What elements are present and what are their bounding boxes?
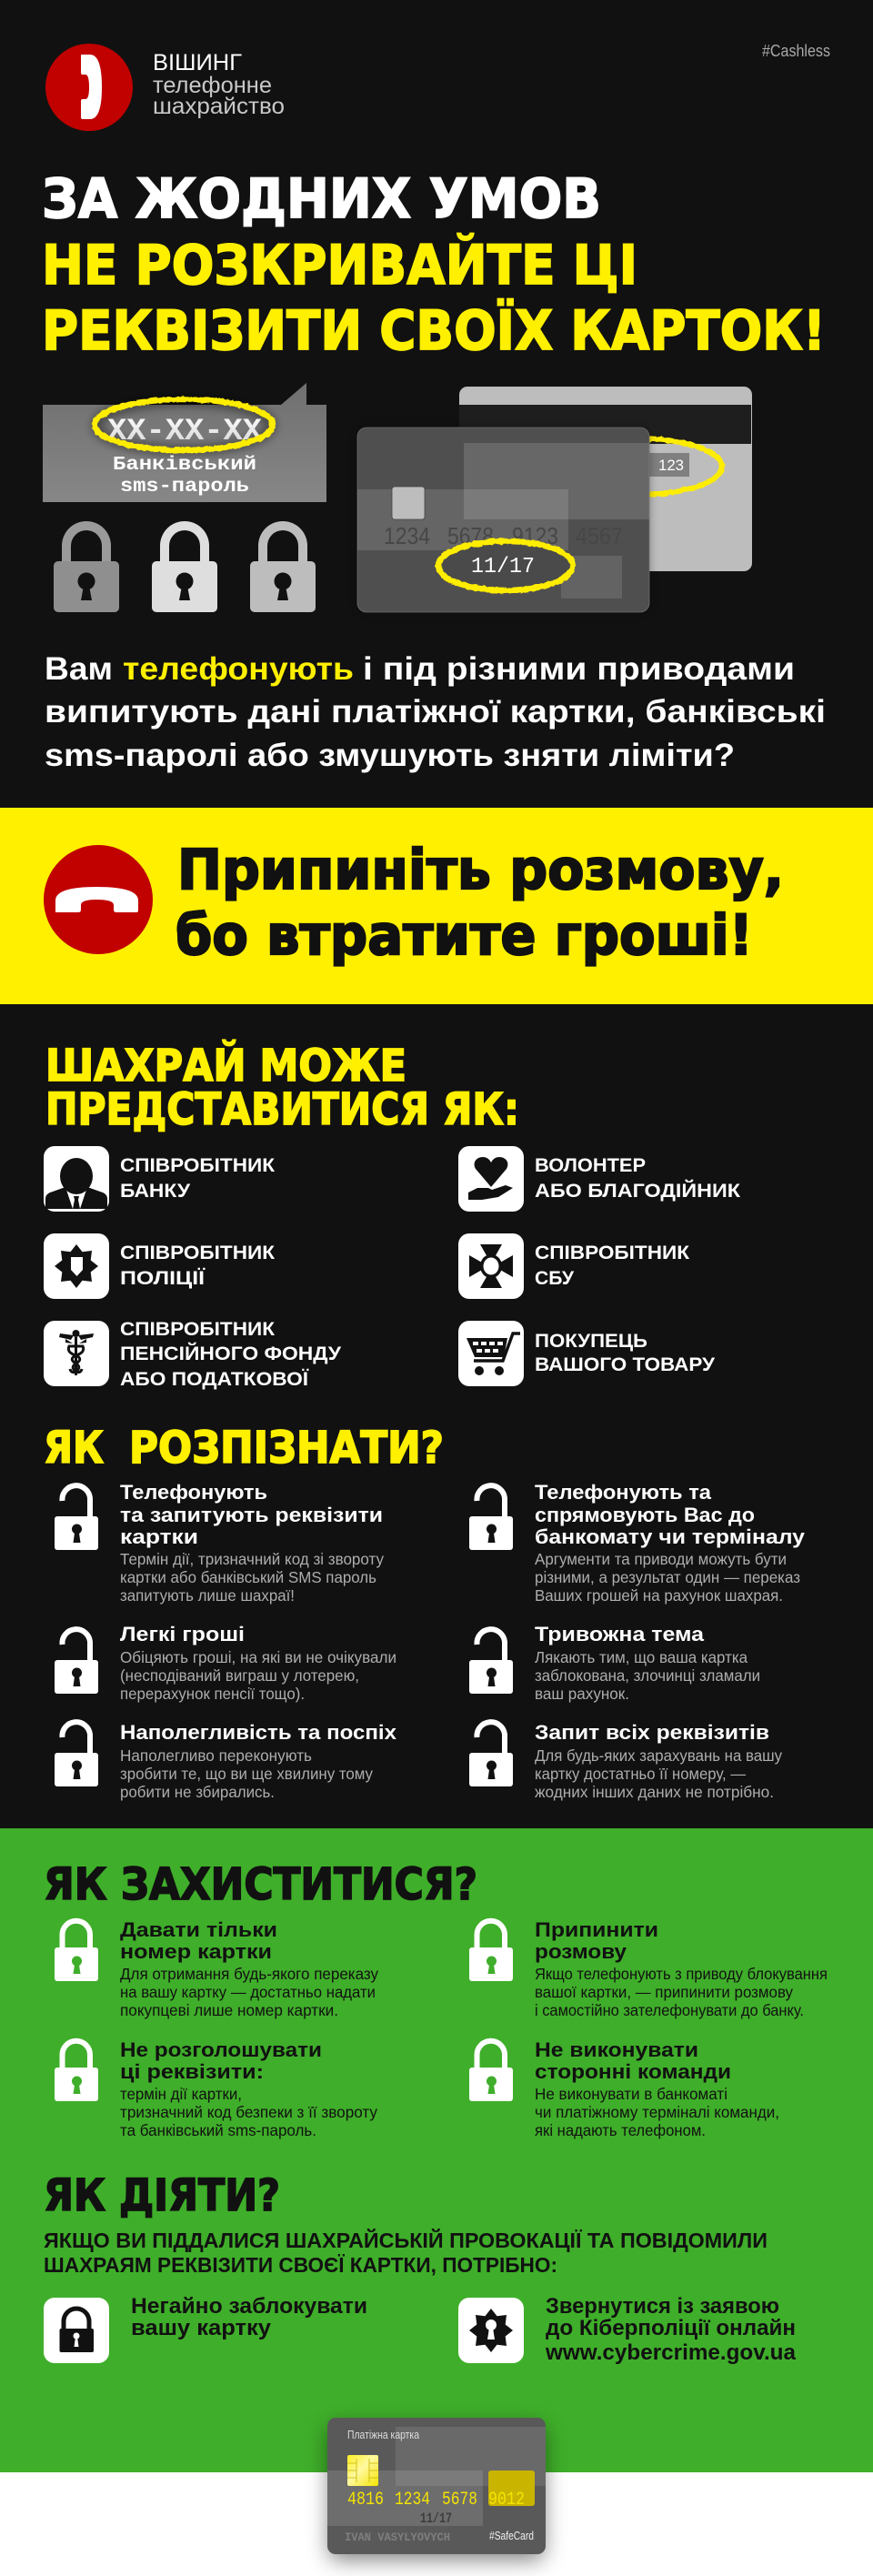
heading: impersonation [45, 1040, 519, 1135]
impersonator: bank employee: СПІВРОБІТНИК [120, 1154, 276, 1176]
impersonator: pension fund or tax: ПЕНСІЙНОГО ФОНДУ [120, 1342, 342, 1364]
tip: do not follow commands [469, 2038, 779, 2139]
sign: asking all details: Для будь-яких зарахувань на вашу [535, 1746, 782, 1765]
card front [357, 428, 649, 612]
card number: 4567 [576, 522, 623, 549]
impersonator: volunteer: ВОЛОНТЕР [535, 1154, 646, 1176]
tip: do not follow commands: чи платіжному терміналі команди, [535, 2103, 779, 2121]
sign: persistence and haste: Наполегливо переконують [120, 1746, 312, 1765]
impersonator: buyer: ПОКУПЕЦЬ [535, 1330, 647, 1352]
sign: easy money: перерахунок пенсії тощо). [120, 1685, 305, 1703]
card number [347, 2490, 525, 2511]
impersonator: volunteer [458, 1146, 741, 1212]
bubble caption: sms-пароль [120, 477, 249, 498]
action: report to cyberpolice: Звернутися із заявою [546, 2294, 779, 2319]
intro paragraph: sms-паролі або змушують зняти ліміти? [45, 738, 735, 773]
icon: hang up phone [44, 845, 153, 954]
sign: asking all details: картку достатньо її номеру, — [535, 1765, 746, 1783]
action: block card: вашу картку [131, 2316, 271, 2340]
highlight oval [438, 541, 573, 590]
bubble caption [113, 455, 256, 498]
tip: do not follow commands: Не виконувати [535, 2038, 698, 2061]
heading: what to do: ЯК ДІЯТИ? [44, 2170, 280, 2221]
action: block card [44, 2294, 367, 2363]
sign: asking card details: запитують лише шахраї! [120, 1586, 295, 1605]
impersonator: police: ПОЛІЦІЇ [120, 1267, 206, 1289]
sign: easy money [55, 1623, 396, 1703]
sign: sending to ATM: Телефонують та [535, 1481, 712, 1504]
sign: alarming topic: Тривожна тема [535, 1623, 705, 1645]
sign: asking card details: картки [120, 1525, 198, 1548]
padlock 3 [250, 521, 316, 612]
tip: stop the call: вашої картки, — припинити розмову [535, 1983, 793, 2001]
tip: give only card number: на вашу картку — достатньо надати [120, 1983, 376, 2001]
magnetic stripe [459, 405, 751, 444]
sign: persistence and haste: зробити те, що ви ще хвилину тому [120, 1765, 373, 1783]
heading: how to protect: ЯК ЗАХИСТИТИСЯ? [44, 1859, 477, 1910]
yellow call to action band [0, 808, 873, 1004]
topic text: ВІШИНГ [153, 50, 242, 75]
sign: alarming topic: ваш рахунок. [535, 1685, 629, 1703]
intro paragraph: і під різними приводами [363, 651, 795, 687]
tip: stop the call: розмову [535, 1940, 627, 1963]
sign: persistence and haste: Наполегливість та поспіх [120, 1721, 397, 1744]
tip: stop the call: Припинити [535, 1918, 658, 1941]
instructions lead text: ШАХРАЯМ РЕКВІЗИТИ СВОЄЇ КАРТКИ, ПОТРІБНО: [44, 2253, 557, 2277]
main title: НЕ РОЗКРИВАЙТЕ ЦІ [42, 232, 637, 297]
action: block card: Негайно заблокувати [131, 2294, 367, 2319]
expiry date: 11/17 [471, 555, 535, 579]
card number: 1234 [395, 2490, 430, 2511]
tip: stop the call: Якщо телефонують з приводу блокування [535, 1965, 828, 1983]
heading: how to recognise: ЯК [44, 1423, 104, 1474]
white footer background [0, 2472, 873, 2576]
card number: 1234 [384, 522, 430, 549]
tip: stop the call: і самостійно зателефонувати до банку. [535, 2001, 804, 2019]
impersonator: police [44, 1233, 276, 1299]
card back with CVV [459, 387, 752, 571]
sign: sending to ATM: банкомату чи терміналу [535, 1525, 806, 1548]
instructions lead text [44, 2228, 768, 2277]
tip: do not disclose: ці реквізити: [120, 2060, 264, 2083]
heading: how to recognise: РОЗПІЗНАТИ? [129, 1423, 444, 1474]
sign: sending to ATM: різними, а результат один — переказ [535, 1568, 800, 1586]
sign: asking all details [469, 1721, 782, 1801]
impersonator: SBU: СБУ [535, 1267, 575, 1289]
sign: asking card details [55, 1481, 384, 1605]
hashtag: #Cashless [762, 42, 830, 60]
safe card illustration [327, 2418, 546, 2560]
tip: do not disclose: термін дії картки, [120, 2085, 242, 2103]
tip: do not disclose: тризначний код безпеки з її звороту [120, 2103, 377, 2121]
sign: asking card details: та запитують реквізити [120, 1504, 383, 1526]
chip [347, 2455, 378, 2486]
tip: do not follow commands: які надають телефоном. [535, 2121, 706, 2139]
topic text: шахрайство [153, 94, 285, 119]
padlock 1 [54, 521, 119, 612]
impersonator: volunteer: АБО БЛАГОДІЙНИК [535, 1179, 741, 1202]
action: report to cyberpolice: www.cybercrime.gov.ua [545, 2340, 796, 2365]
instructions lead text: ЯКЩО ВИ ПІДДАЛИСЯ ШАХРАЙСЬКІЙ ПРОВОКАЦІЇ ТА ПОВІДОМИЛИ [44, 2228, 768, 2252]
tip: do not follow commands: сторонні команди [535, 2060, 731, 2083]
hologram [488, 2470, 535, 2506]
sign: sending to ATM: Аргументи та приводи можуть бути [535, 1550, 787, 1568]
sign: sending to ATM: спрямовують Вас до [535, 1504, 755, 1526]
speech bubble: sms password [43, 383, 326, 502]
impersonator: bank employee [44, 1146, 276, 1212]
call to action text: Припиніть розмову, [177, 838, 784, 902]
heading: impersonation: ШАХРАЙ МОЖЕ [45, 1040, 406, 1092]
tip: do not follow commands: Не виконувати в банкоматі [535, 2085, 728, 2103]
impersonator: SBU: СПІВРОБІТНИК [535, 1242, 690, 1263]
card number [384, 522, 623, 549]
icon: red circle with handset [45, 44, 133, 131]
card hashtag: #SafeCard [489, 2530, 534, 2542]
tip: do not disclose: та банківський sms-пароль. [120, 2121, 316, 2139]
impersonator: police: СПІВРОБІТНИК [120, 1242, 276, 1263]
tip: do not disclose [55, 2038, 377, 2139]
bubble caption: Банківський [113, 455, 256, 476]
sign: persistence and haste [55, 1721, 397, 1801]
topic text [153, 50, 285, 119]
call to action text: бо втратите гроші! [176, 903, 753, 968]
card number: 5678 [442, 2490, 477, 2511]
card number: 9123 [512, 522, 558, 549]
tip: do not disclose: Не розголошувати [120, 2038, 322, 2061]
card back with CVV: 123 [658, 457, 684, 474]
header: phone logo and topic [45, 44, 285, 131]
code digits: XX-XX-XX [107, 415, 263, 449]
chip [392, 487, 425, 519]
sign: asking all details: жодних інших даних не потрібно. [535, 1783, 774, 1801]
card number: 9012 [488, 2490, 525, 2511]
sign: sending to ATM: Ваших грошей на рахунок шахрая. [535, 1586, 783, 1605]
intro paragraph [45, 651, 826, 773]
expiry: 11/17 [420, 2511, 452, 2527]
icons: three padlocks [54, 521, 316, 612]
green section background [0, 1828, 873, 2472]
sign: asking all details: Запит всіх реквізитів [535, 1721, 769, 1744]
tip: give only card number: покупцеві лише номер картки. [120, 2001, 338, 2019]
call to action text [176, 838, 784, 968]
sign: easy money: Легкі гроші [120, 1623, 245, 1645]
black page background [0, 0, 873, 1828]
sign: persistence and haste: робити не збирались. [120, 1783, 275, 1801]
impersonator: pension fund or tax [44, 1318, 342, 1390]
impersonator: buyer: ВАШОГО ТОВАРУ [535, 1353, 716, 1375]
tip: give only card number: номер картки [120, 1940, 272, 1963]
sign: asking card details: картки або банківський SMS пароль [120, 1568, 376, 1586]
padlock 2 [152, 521, 217, 612]
action: report to cyberpolice: до Кіберполіції онлайн [546, 2316, 796, 2340]
impersonator: buyer [458, 1321, 716, 1386]
topic text: телефонне [153, 73, 272, 98]
card number: 4816 [347, 2490, 384, 2511]
sign: asking card details: Термін дії, тризначний код зі звороту [120, 1550, 384, 1568]
CVV box [609, 453, 689, 477]
tip: give only card number: Для отримання будь-якого переказу [120, 1965, 378, 1983]
heading: impersonation: ПРЕДСТАВИТИСЯ ЯК: [45, 1084, 519, 1135]
card number: 5678 [447, 522, 494, 549]
impersonator: bank employee: БАНКУ [120, 1180, 191, 1202]
intro paragraph: випитують дані платіжної картки, банківські [45, 694, 826, 730]
card title: Платіжна картка [347, 2429, 419, 2441]
tip: give only card number [55, 1918, 378, 2019]
impersonator: SBU [458, 1233, 690, 1299]
holder name: IVAN VASYLYOVYCH [345, 2531, 450, 2544]
sign: easy money: Обіцяють гроші, на які ви не очікували [120, 1648, 396, 1666]
action: report to cyberpolice [458, 2294, 796, 2365]
sign: alarming topic: заблокована, злочинці зламали [535, 1666, 760, 1685]
main title [42, 167, 826, 363]
sign: asking card details: Телефонують [120, 1481, 267, 1504]
sign: sending to ATM [469, 1481, 806, 1605]
impersonator: pension fund or tax: СПІВРОБІТНИК [120, 1318, 276, 1340]
sign: alarming topic [469, 1623, 760, 1703]
intro paragraph: телефонують [123, 651, 354, 687]
hand-drawn highlight oval [95, 399, 273, 450]
sign: alarming topic: Лякають тим, що ваша картка [535, 1648, 748, 1666]
sign: easy money: (несподіваний виграш у лотерею, [120, 1666, 359, 1685]
tip: stop the call [469, 1918, 828, 2019]
impersonator: pension fund or tax: АБО ПОДАТКОВОЇ [120, 1368, 309, 1390]
intro paragraph: Вам [45, 651, 113, 687]
highlight oval [551, 438, 722, 495]
main title: ЗА ЖОДНИХ УМОВ [42, 167, 601, 231]
tip: give only card number: Давати тільки [120, 1918, 277, 1941]
